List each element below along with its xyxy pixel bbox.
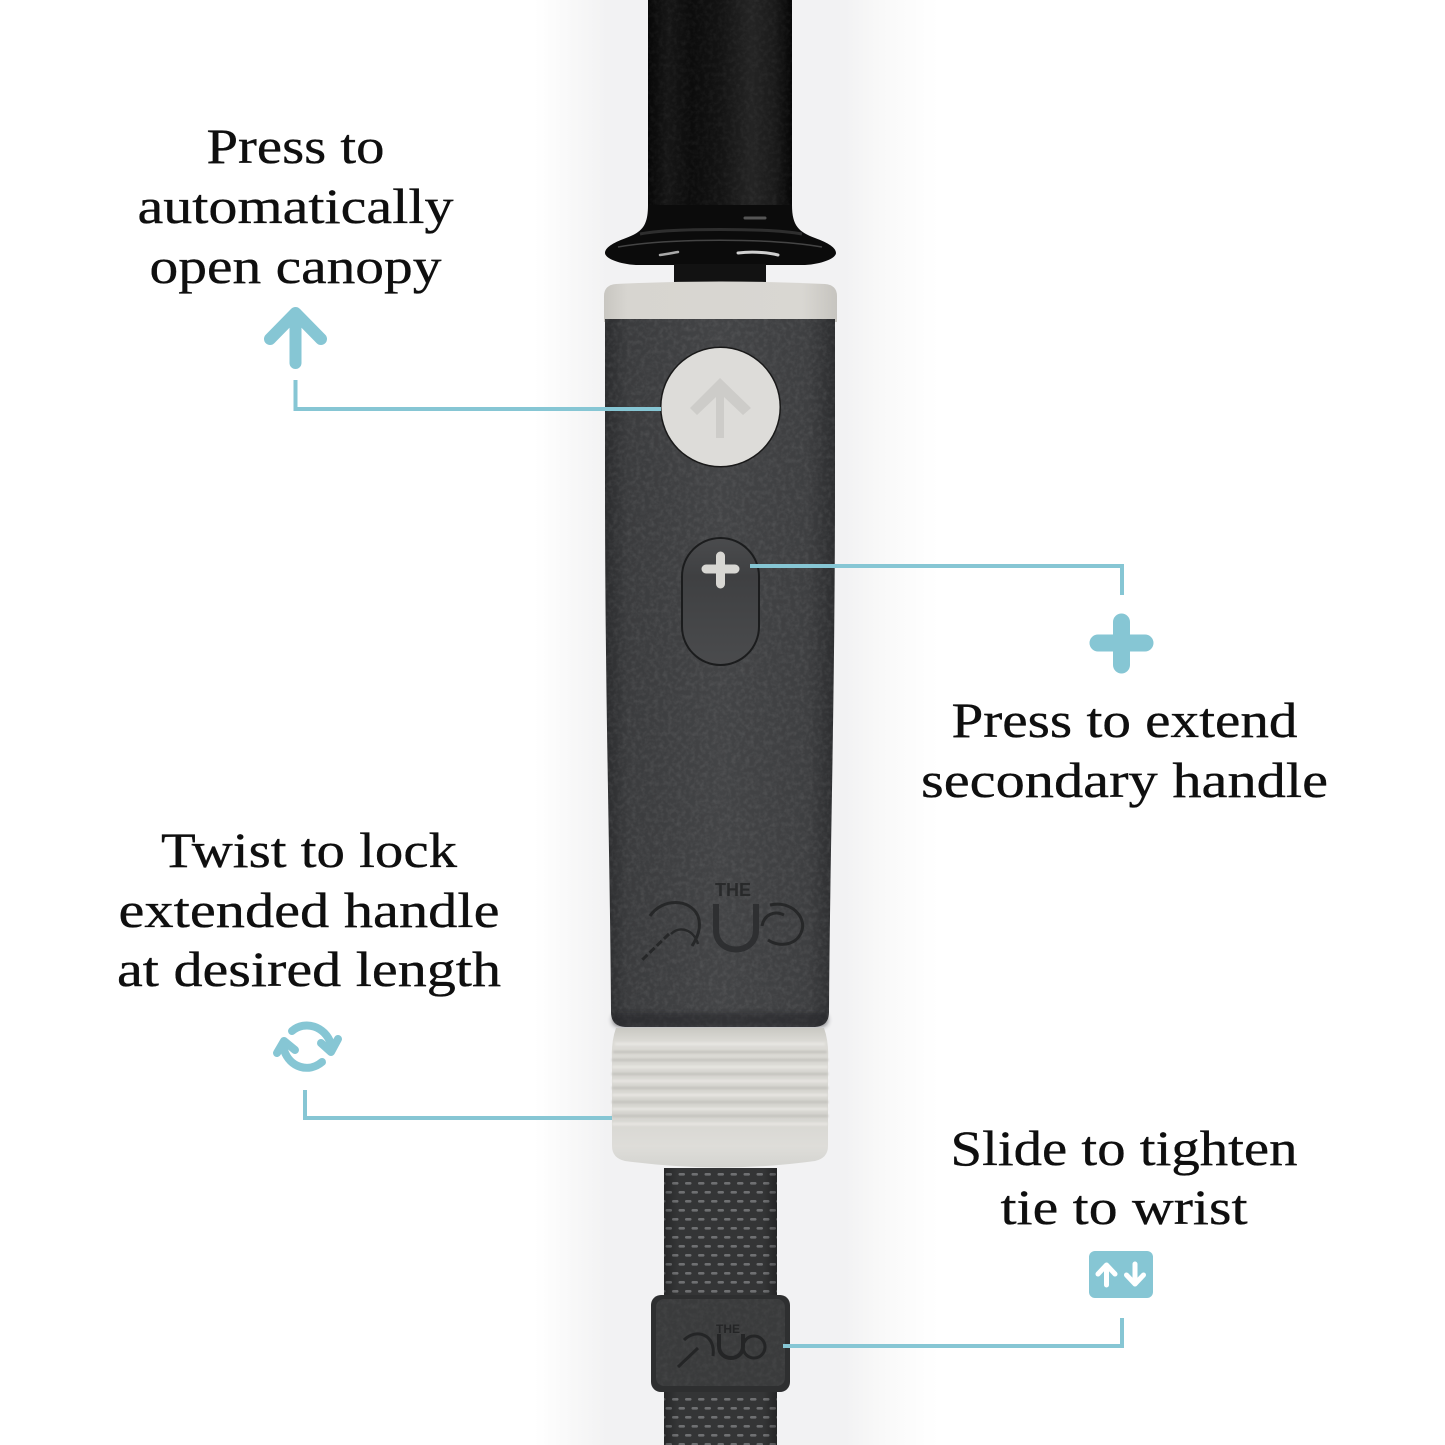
icon: embossed plus [706,556,735,584]
connector line [296,380,661,409]
icon: plus [1098,622,1145,665]
text: extend handle: Press to extend [952,692,1298,748]
callout: slide to tighten [783,1120,1298,1346]
text: open canopy [138,118,454,294]
callout: open canopy [138,118,661,409]
connector line [305,1090,612,1118]
icon: up arrow [270,313,321,363]
text: slide to tighten [950,1120,1298,1235]
light top collar [604,282,837,322]
text: slide to tighten: tie to wrist [1000,1179,1248,1235]
strap slider [651,1295,790,1392]
text: extend handle: secondary handle [921,752,1328,808]
callout: extend handle [750,566,1328,808]
text: extend handle [921,692,1328,808]
icon: rotate arrows [277,1025,338,1068]
text: open canopy: Press to [206,118,384,174]
connector line [783,1318,1122,1346]
embossed logo on grip: THE [715,880,751,900]
ribbed twist-lock ring [612,1028,828,1168]
icon: up and down arrows [1089,1251,1153,1298]
text: twist to lock: at desired length [117,941,501,997]
text: open canopy: open canopy [150,238,442,294]
connector line [750,566,1122,595]
umbrella handle product [604,0,837,1445]
embossed logo on grip [641,880,803,961]
text: slide to tighten: Slide to tighten [950,1120,1298,1176]
strap slider: THE [716,1322,740,1336]
dark grip body [605,319,835,1027]
button: open canopy [660,346,781,468]
text: twist to lock [117,822,501,997]
woven wrist strap [664,1168,777,1445]
text: twist to lock: Twist to lock [161,822,457,878]
button: extend handle [681,537,760,666]
callout: twist to lock [117,822,612,1118]
text: open canopy: automatically [138,178,454,234]
black shaft with flared ring [605,0,836,282]
text: twist to lock: extended handle [118,882,499,938]
icon: embossed up arrow [690,378,751,438]
